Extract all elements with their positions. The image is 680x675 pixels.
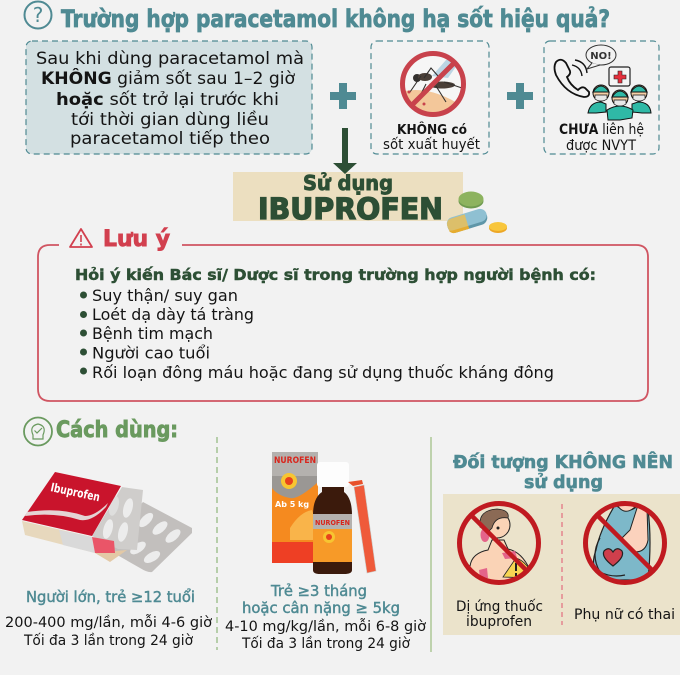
- image: nurofen syrup: [272, 452, 376, 574]
- icon: light bulb: [24, 418, 52, 446]
- icon: mosquito prohibited: [400, 54, 465, 118]
- divider 1: [216, 437, 218, 650]
- text: adult dose: 200-400 mg/lần, mỗi 4-6 giờ: [5, 614, 212, 631]
- warning list: Loét dạ dày tá tràng: [92, 305, 254, 324]
- image: nurofen syrup: Ab 5 kg: [275, 500, 309, 509]
- warning list: [80, 286, 554, 382]
- label: no dengue: KHÔNG có: [397, 122, 467, 138]
- panel: no dengue: [371, 41, 489, 154]
- warning list: Bệnh tim mạch: [92, 324, 213, 343]
- text: child dose: 4-10 mg/kg/lần, mỗi 6-8 giờ: [225, 618, 426, 635]
- label: allergy: ibuprofen: [466, 614, 532, 630]
- panel: condition text: tới thời gian dùng liều: [71, 109, 269, 130]
- panel: condition text: KHÔNG giảm sốt sau 1–2 giờ: [41, 67, 296, 89]
- panel: no medical contact: [544, 41, 659, 154]
- icon: plus 1: [330, 83, 356, 109]
- heading: contraindicated: [453, 451, 673, 493]
- text: child dose: Tối đa 3 lần trong 24 giờ: [241, 635, 410, 652]
- panel: contraindicated groups: [443, 494, 680, 635]
- warning list: Suy thận/ suy gan: [92, 286, 238, 305]
- heading: contraindicated: Đối tượng KHÔNG NÊN: [453, 451, 673, 473]
- text: child dose: [225, 582, 426, 652]
- label: no dengue: sốt xuất huyết: [383, 136, 480, 153]
- label: no medical contact: CHƯA liên hệ: [559, 122, 644, 138]
- image: nurofen syrup: NUROFEN: [274, 456, 316, 466]
- text: child dose: hoặc cân nặng ≥ 5kg: [242, 599, 400, 617]
- panel: condition text: [26, 41, 312, 154]
- icon: question mark: ?: [33, 3, 43, 27]
- label: pregnant: Phụ nữ có thai: [574, 607, 675, 623]
- image: nurofen syrup: NUROFEN: [315, 519, 350, 527]
- heading: usage: Cách dùng:: [56, 418, 178, 443]
- label: no dengue: [383, 122, 480, 153]
- panel: warning: [38, 227, 648, 401]
- icon: warning triangle: [70, 229, 92, 247]
- panel: condition text: Sau khi dùng paracetamol mà: [36, 49, 304, 69]
- warning list: Người cao tuổi: [92, 344, 210, 362]
- text: adult dose: Người lớn, trẻ ≥12 tuổi: [26, 588, 195, 606]
- banner: use ibuprofen: [233, 171, 463, 226]
- panel: condition text: paracetamol tiếp theo: [70, 128, 270, 149]
- banner: use ibuprofen: IBUPROFEN: [258, 192, 443, 226]
- arrow: down: [333, 128, 357, 174]
- text: child dose: Trẻ ≥3 tháng: [270, 582, 367, 600]
- divider 2: [430, 437, 432, 652]
- panel: condition text: hoặc sốt trở lại trước khi: [56, 89, 279, 110]
- icon: pills: [445, 192, 507, 235]
- text: adult dose: [5, 588, 212, 649]
- label: no medical contact: [559, 122, 644, 154]
- banner: use ibuprofen: Sử dụng: [303, 171, 393, 195]
- icon: phone and doctors: NO!: [590, 51, 612, 62]
- heading: contraindicated: sử dụng: [524, 473, 603, 493]
- icon: allergy prohibited: [460, 504, 538, 582]
- image: ibuprofen box and blister: [22, 472, 192, 572]
- warning heading: Lưu ý: [103, 227, 170, 252]
- warning intro: Hỏi ý kiến Bác sĩ/ Dược sĩ trong trường hợp người bệnh có:: [75, 265, 596, 284]
- warning list: Rối loạn đông máu hoặc đang sử dụng thuốc kháng đông: [92, 363, 554, 382]
- text: adult dose: Tối đa 3 lần trong 24 giờ: [23, 632, 193, 649]
- label: allergy: [456, 598, 543, 630]
- image: ibuprofen box and blister: Ibuprofen: [49, 480, 101, 504]
- label: no medical contact: được NVYT: [566, 138, 636, 154]
- label: allergy: Dị ứng thuốc: [456, 598, 543, 615]
- icon: question mark: [24, 2, 52, 28]
- icon: plus 2: [507, 83, 533, 109]
- icon: pregnant prohibited: [586, 498, 664, 582]
